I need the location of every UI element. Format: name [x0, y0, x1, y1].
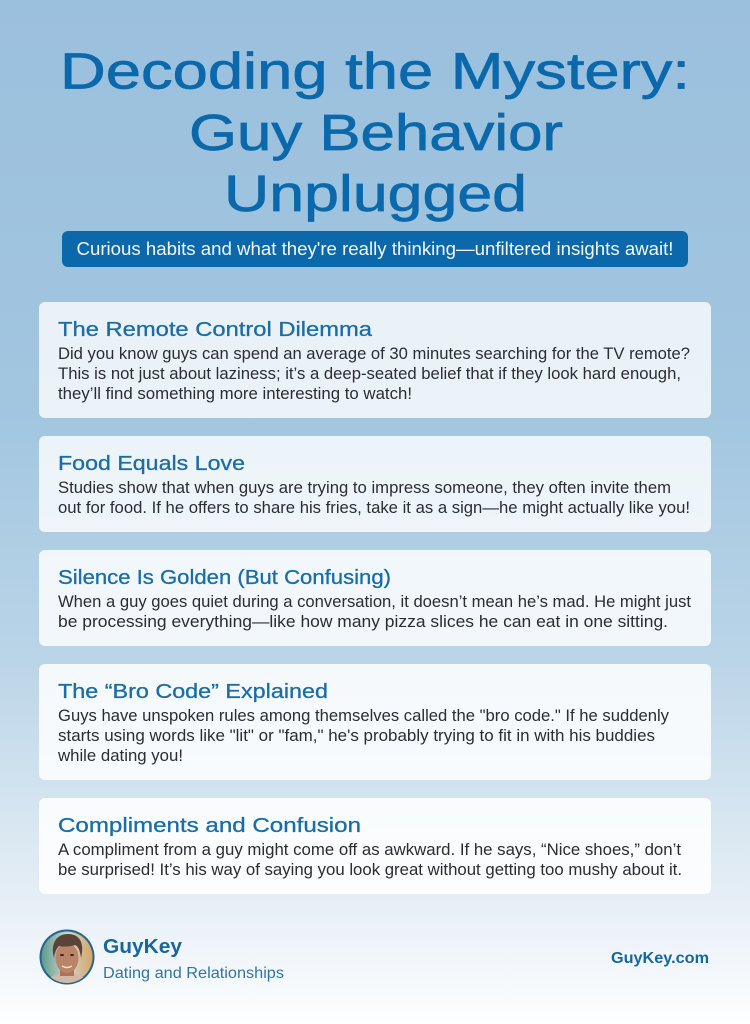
- panel: The "Bro Code" Explained: [39, 664, 711, 780]
- panel: Silence Is Golden (But Confusing): Silence Is Golden (But Confusing): [58, 566, 391, 589]
- panel: Food Equals Love: Studies show that when guys are trying to impress someone, they often invite them: [58, 479, 671, 497]
- panel: Silence Is Golden (But Confusing): When a guy goes quiet during a conversation, it doesn’t mean he’s mad. He might just: [58, 593, 691, 611]
- brand name: GuyKey: [103, 935, 183, 958]
- panel: Food Equals Love: Food Equals Love: [58, 452, 245, 475]
- panel: Compliments and Confusion: [39, 798, 711, 894]
- brand tagline: Dating and Relationships: [103, 965, 284, 982]
- panel: The Remote Control Dilemma: Did you know guys can spend an average of 30 minutes searching for the TV remote?: [58, 345, 690, 363]
- title: Unplugged: [224, 165, 527, 222]
- panel: The Remote Control Dilemma: [39, 302, 711, 418]
- title: [60, 42, 690, 222]
- panel: Food Equals Love: out for food. If he offers to share his fries, take it as a sign—he might actually like you!: [58, 499, 690, 517]
- title: Guy Behavior: [189, 104, 563, 161]
- panel: The Remote Control Dilemma: This is not just about laziness; it’s a deep-seated belief that if they look hard enough,: [58, 365, 681, 383]
- panel: The "Bro Code" Explained: starts using words like "lit" or "fam," he's probably trying to fit in with his buddies: [58, 727, 655, 745]
- icon: author avatar: [40, 930, 94, 985]
- panel: The "Bro Code" Explained: The “Bro Code” Explained: [58, 680, 328, 703]
- panel: Silence Is Golden (But Confusing): [39, 550, 711, 646]
- title: Decoding the Mystery:: [60, 42, 690, 100]
- subtitle banner: Curious habits and what they're really thinking—unfiltered insights await!: [76, 239, 673, 259]
- website link: GuyKey.com: [611, 950, 709, 967]
- panel: Compliments and Confusion: A compliment from a guy might come off as awkward. If he says, “Nice shoes,” don’t: [58, 841, 681, 859]
- panel: Compliments and Confusion: Compliments and Confusion: [58, 814, 361, 837]
- panel: The "Bro Code" Explained: Guys have unspoken rules among themselves called the "bro code." If he suddenly: [58, 707, 670, 725]
- panel: Silence Is Golden (But Confusing): be processing everything—like how many pizza slices he can eat in one sitting.: [58, 613, 668, 631]
- panel: The Remote Control Dilemma: they’ll find something more interesting to watch!: [58, 385, 412, 403]
- panel: Compliments and Confusion: be surprised! It’s his way of saying you look great without getting too mushy about it.: [58, 861, 682, 879]
- subtitle banner: [62, 231, 688, 267]
- panel: Food Equals Love: [39, 436, 711, 532]
- panel: The Remote Control Dilemma: The Remote Control Dilemma: [58, 318, 373, 341]
- panel: The "Bro Code" Explained: while dating you!: [57, 747, 183, 765]
